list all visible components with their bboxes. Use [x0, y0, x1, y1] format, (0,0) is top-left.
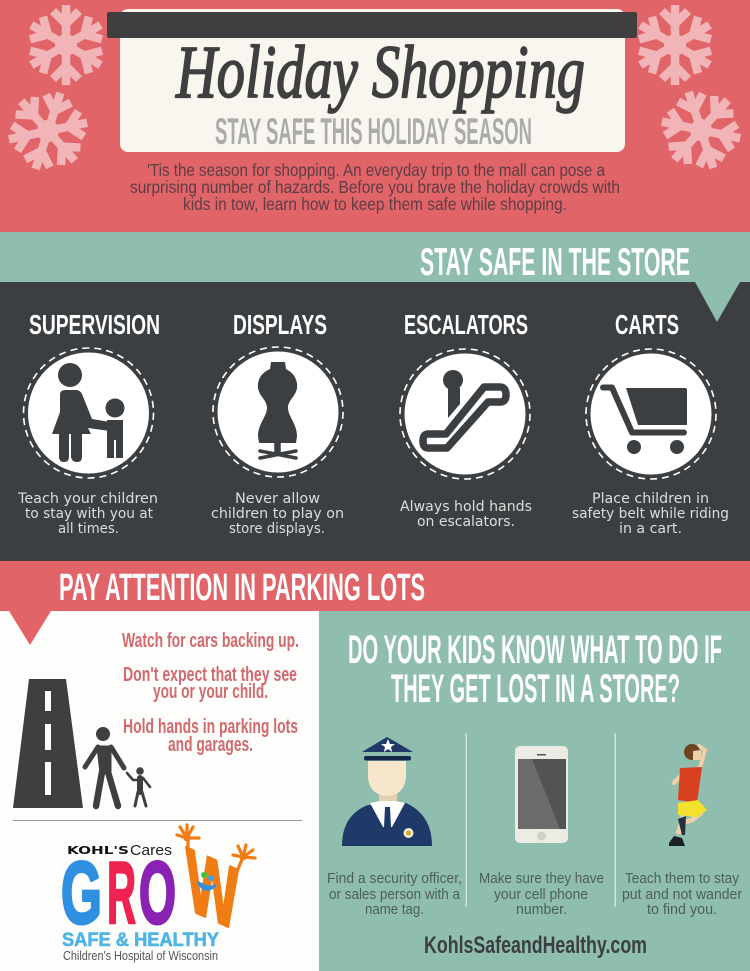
intro text: 'Tis the season for shopping. An everyday trip to the mall can pose a: [147, 160, 605, 180]
tip: escalators: Always hold hands: [400, 499, 532, 515]
logo: Kohl's Cares Grow: W: [186, 829, 238, 950]
intro text: surprising number of hazards. Before you brave the holiday crowds with: [130, 177, 620, 197]
caption: phone: your cell phone: [494, 887, 588, 903]
caption: officer: or sales person with a: [329, 887, 461, 903]
caption: phone: [479, 871, 604, 918]
icon: adult and child walking: [85, 727, 150, 806]
icon: road: [13, 679, 83, 808]
pointer: [695, 282, 740, 322]
tip: carts: safety belt while riding: [572, 506, 729, 522]
parking tips text: Hold hands in parking lots: [123, 716, 298, 738]
parking tips text: and garages.: [168, 734, 253, 756]
pointer: [9, 611, 51, 645]
tip: escalators: on escalators.: [417, 514, 515, 530]
tip: escalators: [400, 309, 532, 530]
heading: [348, 628, 722, 711]
tip: carts: [572, 309, 729, 537]
icon: parent and child: [24, 348, 154, 478]
icon: phone: [515, 746, 568, 843]
logo: Kohl's Cares Grow: SAFE & HEALTHY: [62, 930, 219, 951]
logo: Kohl's Cares Grow: KOHL'S: [67, 844, 129, 857]
caption: stay put: Teach them to stay: [625, 871, 740, 887]
title card: [120, 9, 625, 152]
section band: parking lots: [0, 561, 750, 611]
parking tips text: Don't expect that they see: [123, 664, 297, 686]
parking tips text: Watch for cars backing up.: [122, 630, 299, 652]
hands: [177, 825, 255, 869]
panel: parking tips: [0, 611, 319, 971]
caption: officer: Find a security officer,: [327, 871, 462, 887]
parking tips text: [122, 630, 299, 756]
tip: displays: [211, 309, 344, 537]
parking tips text: you or your child.: [153, 681, 268, 703]
logo: Kohl's Cares Grow: O: [139, 843, 176, 942]
panel: store tips: [0, 282, 750, 561]
tip: supervision: [17, 309, 160, 537]
tip: escalators: ESCALATORS: [404, 309, 528, 340]
section band: stay safe in the store: [0, 232, 750, 284]
caption: phone: Make sure they have: [479, 871, 604, 887]
website: KohlsSafeandHealthy.com: [424, 932, 647, 959]
tip: supervision: SUPERVISION: [29, 309, 160, 340]
tip: displays: Never allow: [235, 491, 320, 507]
panel: lost in a store: [319, 611, 750, 971]
panel: header: [0, 0, 750, 232]
caption: officer: name tag.: [365, 902, 424, 918]
heading: PAY ATTENTION IN PARKING LOTS: [59, 567, 425, 609]
caption: phone: number.: [516, 902, 567, 918]
caption: stay put: [622, 871, 742, 918]
icon: escalator: [400, 349, 530, 479]
tip: carts: Place children in: [592, 491, 709, 507]
icon: snowflake top right: [634, 5, 716, 85]
tip: supervision: Teach your children: [17, 491, 158, 507]
tip: displays: children to play on: [211, 506, 344, 522]
icon: dress form: [213, 347, 343, 477]
icon: snowflake bottom right: [650, 79, 750, 181]
logo: Kohl's Cares Grow: R: [107, 843, 136, 942]
caption: stay put: to find you.: [647, 902, 717, 918]
title bar: [107, 12, 637, 38]
tip: displays: store displays.: [229, 521, 325, 537]
logo: Kohl's Cares Grow: [61, 825, 255, 963]
logo: Kohl's Cares Grow: Children's Hospital of Wisconsin: [63, 948, 218, 963]
intro text: [130, 160, 620, 214]
tip: supervision: all times.: [58, 521, 119, 537]
intro text: kids in tow, learn how to keep them safe while shopping.: [183, 194, 567, 214]
icon: snowflake bottom left: [0, 80, 99, 182]
caption: officer: [327, 871, 462, 918]
tip: carts: CARTS: [615, 309, 679, 340]
tip: carts: in a cart.: [619, 521, 682, 537]
icon: shopping cart: [586, 349, 716, 479]
logo: Kohl's Cares Grow: G: [61, 843, 102, 942]
icon: snowflake top left: [25, 5, 107, 85]
logo: Kohl's Cares Grow: Cares: [130, 842, 172, 859]
icon: boy covering eyes: [669, 744, 707, 846]
divider: [13, 820, 302, 821]
icon: security officer: [342, 737, 432, 846]
tip: displays: DISPLAYS: [233, 309, 327, 340]
title: Holiday Shopping: [175, 31, 585, 114]
caption: stay put: put and not wander: [622, 887, 742, 903]
tip: supervision: to stay with you at: [25, 506, 153, 522]
